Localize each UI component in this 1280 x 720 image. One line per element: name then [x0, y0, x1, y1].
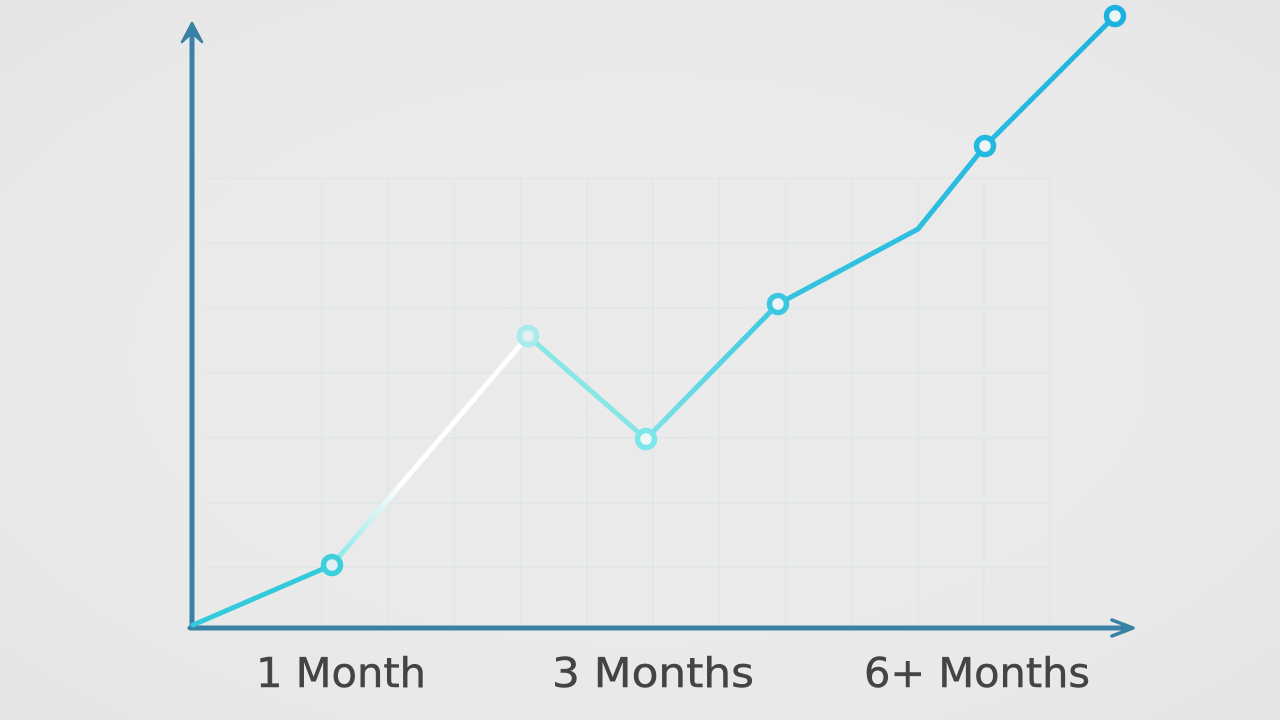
label: 3 months: 3 Months — [552, 649, 754, 697]
trend line — [193, 16, 1115, 625]
marker: top — [1106, 8, 1124, 24]
label: 6+ months: 6+ Months — [864, 649, 1090, 697]
marker: peak — [520, 328, 536, 344]
marker: recovery — [770, 296, 786, 312]
data point markers — [324, 8, 1124, 574]
marker: dip — [638, 430, 654, 448]
x axis with arrow — [190, 620, 1133, 636]
x axis labels — [256, 649, 1090, 697]
marker: climb — [976, 138, 994, 154]
y axis with arrow — [182, 23, 202, 628]
label: 1 month: 1 Month — [256, 649, 426, 697]
grid — [205, 178, 1050, 625]
marker: 1 month — [324, 556, 340, 574]
